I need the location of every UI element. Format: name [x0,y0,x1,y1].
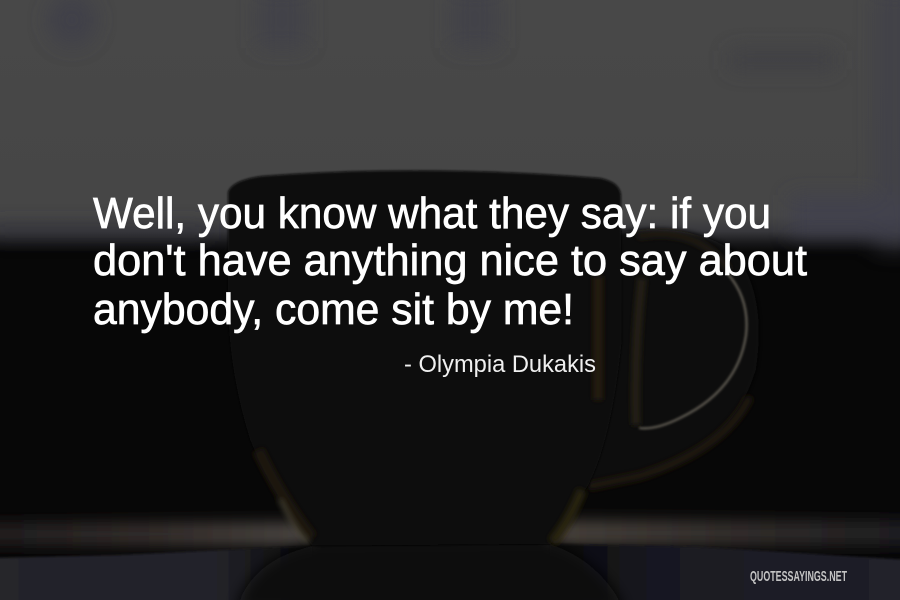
table surface right [550,544,900,600]
line 3: anybody, come sit by me! [93,285,574,334]
table: warm band right [550,520,900,546]
reflection under mug [236,544,625,600]
handle highlights [592,234,748,486]
glow: right lower edge [552,490,582,542]
glow: streak one [594,276,602,400]
table: warm band left [0,522,312,546]
blurred background objects [0,0,900,250]
handle outer bronze edge [592,400,748,486]
glow: streak two [636,278,642,425]
line 1: Well, you know what they say: if you [93,189,771,238]
handle rim top [640,234,728,268]
line 2: don't have anything nice to say about [93,236,807,285]
glow: left edge [280,500,308,542]
table surface left [0,546,312,600]
handle silhouette [590,229,759,488]
mug glow streaks [258,276,642,542]
mug body [228,170,622,546]
glow: left inner bronze [258,450,312,538]
quote text [93,189,807,334]
attribution: - Olympia Dukakis [404,351,596,378]
handle inner rim [640,274,747,428]
